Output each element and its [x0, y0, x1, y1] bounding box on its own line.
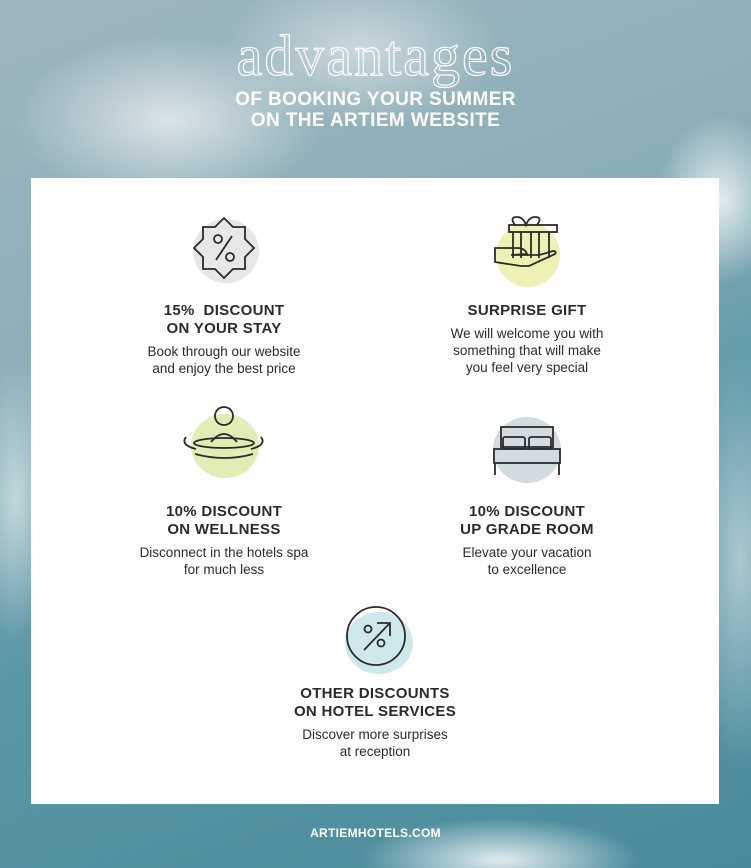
subtitle: ON THE ARTIEM WEBSITE [251, 110, 500, 131]
item: wellness: 10% DISCOUNT [166, 503, 282, 520]
item: other discounts [294, 685, 456, 759]
item: surprise gift: SURPRISE GIFT [468, 302, 586, 319]
item: upgrade room: 10% DISCOUNT [469, 503, 585, 520]
item: surprise gift: you feel very special [466, 360, 588, 375]
item: other discounts: ON HOTEL SERVICES [294, 703, 456, 720]
item: 15% discount: 15% DISCOUNT [164, 302, 284, 319]
item: wellness: ON WELLNESS [167, 521, 281, 538]
item: wellness [140, 503, 308, 577]
icon: wellness [183, 406, 264, 478]
icon: arrow percent [345, 606, 413, 674]
footer: ARTIEMHOTELS.COM [310, 826, 441, 840]
icon: bed [493, 417, 561, 483]
item: upgrade room: UP GRADE ROOM [460, 521, 594, 538]
panel: advantages [31, 178, 719, 804]
subtitle [235, 89, 516, 131]
item: 15% discount: Book through our website [147, 344, 301, 359]
item: other discounts: Discover more surprises [302, 727, 448, 742]
item: upgrade room: Elevate your vacation [462, 545, 592, 560]
item: upgrade room [460, 503, 594, 577]
item: upgrade room: to excellence [488, 562, 566, 577]
item: surprise gift: something that will make [453, 343, 601, 358]
item: surprise gift [450, 302, 603, 375]
item: 15% discount: and enjoy the best price [152, 361, 296, 376]
item: 15% discount [147, 302, 301, 376]
item: other discounts: at reception [340, 744, 410, 759]
subtitle: OF BOOKING YOUR SUMMER [235, 89, 516, 110]
item: wellness: for much less [184, 562, 264, 577]
icon: gift [494, 216, 560, 287]
icon: percent badge [192, 216, 259, 283]
item: other discounts: OTHER DISCOUNTS [300, 685, 450, 702]
item: 15% discount: ON YOUR STAY [166, 320, 282, 337]
title [235, 34, 516, 131]
item: surprise gift: We will welcome you with [451, 326, 603, 341]
item: wellness: Disconnect in the hotels spa [140, 545, 308, 560]
